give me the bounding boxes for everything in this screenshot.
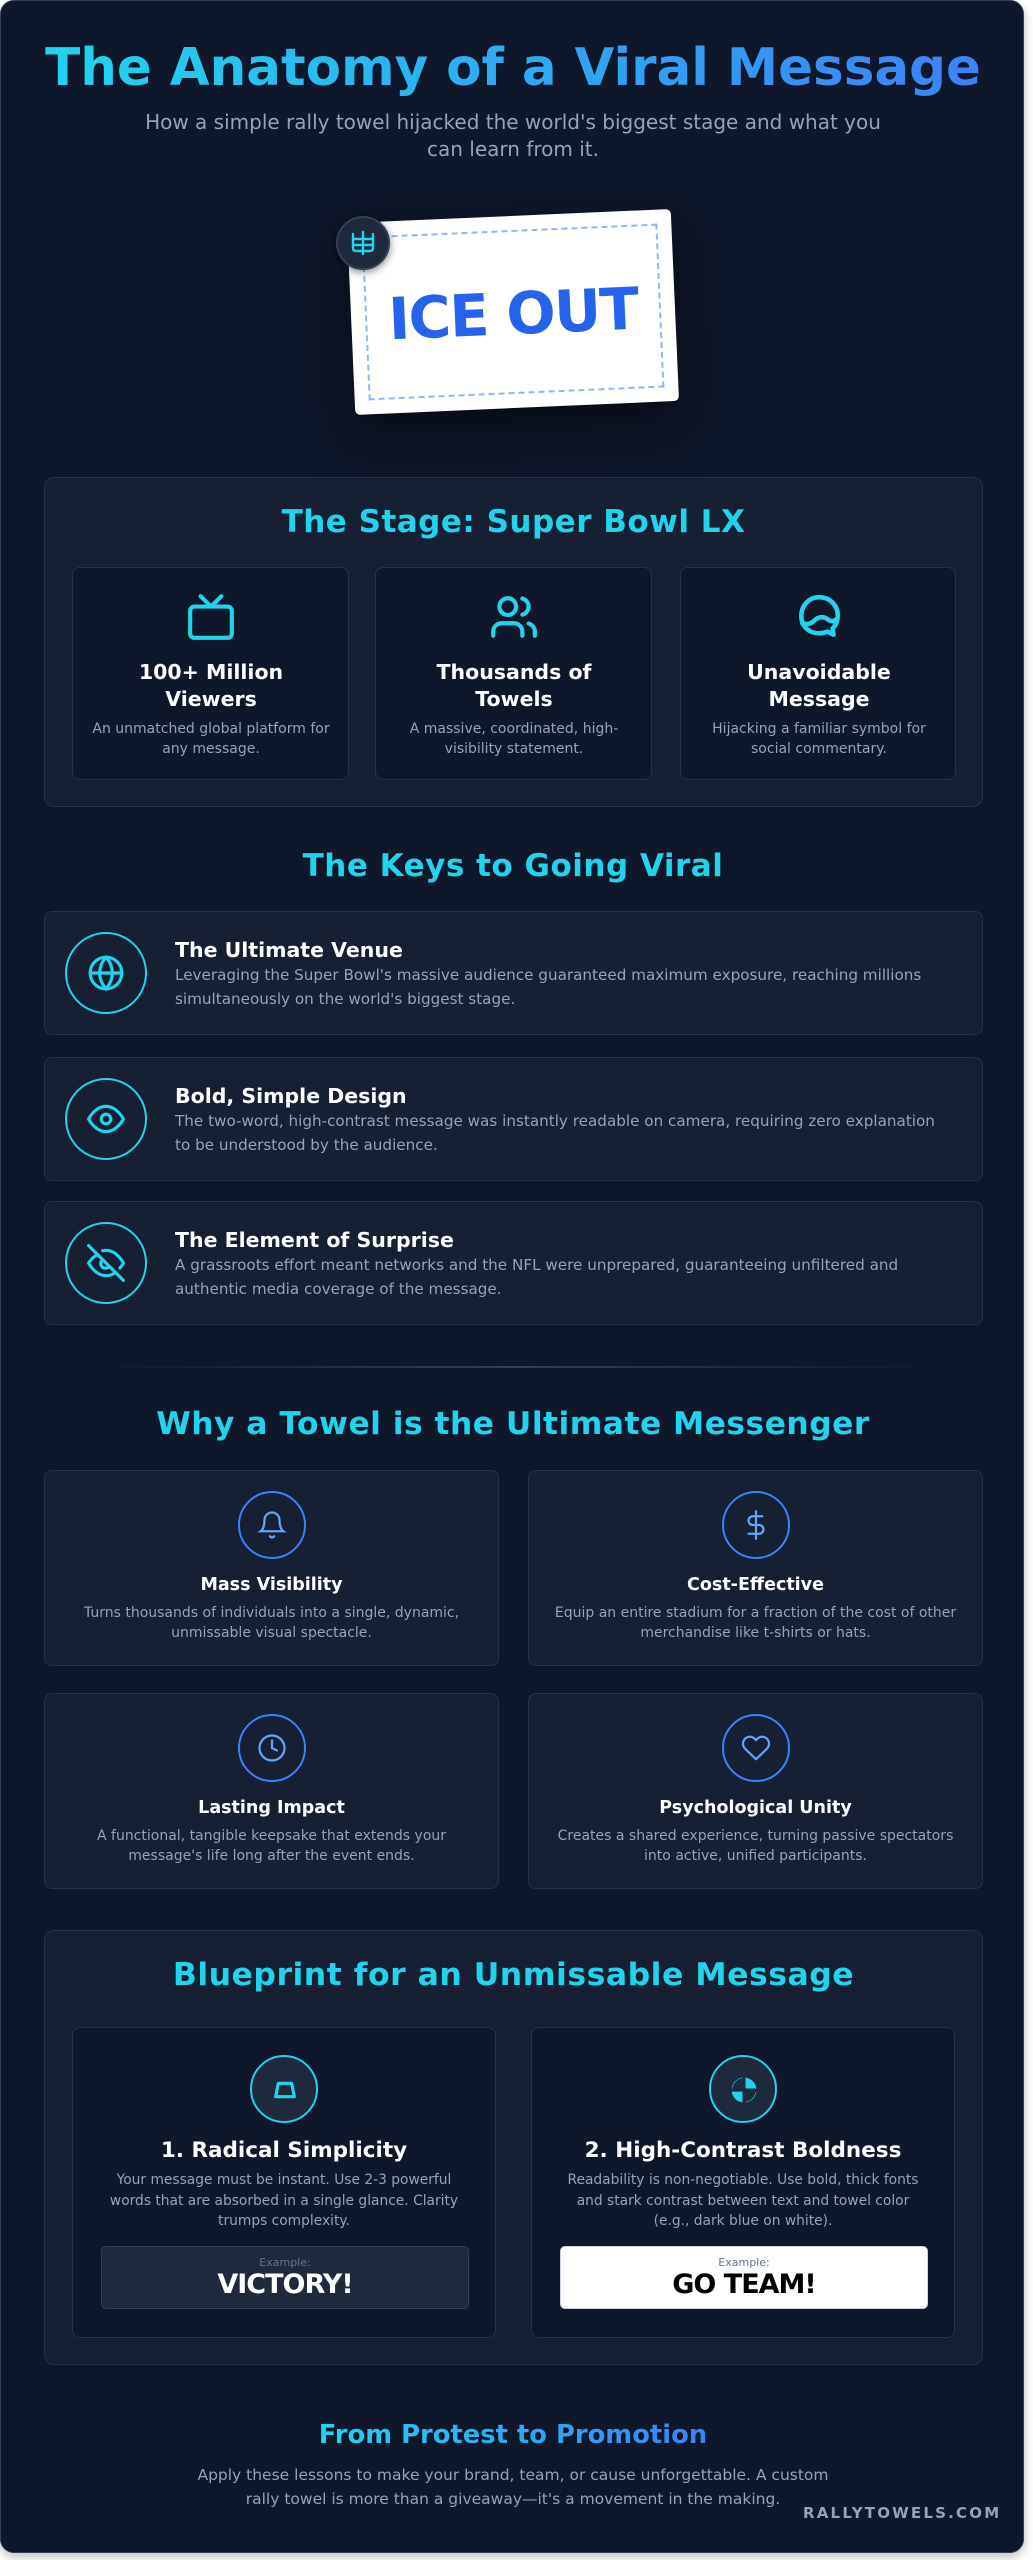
- row: ultimate venue: The Ultimate Venue: [175, 938, 403, 962]
- row: bold simple design: Bold, Simple Design: [175, 1084, 407, 1108]
- card: cost-effective: Equip an entire stadium for a fraction of the cost of other merchandise like t-shirts or hats.: [555, 1605, 956, 1641]
- icon: eye-off: [65, 1222, 147, 1304]
- card: high contrast: Readability is non-negotiable. Use bold, thick fonts and stark contrast between text and towel color (e.g., dark blue on white).: [568, 2172, 918, 2229]
- brand: RALLYTOWELS.COM: [803, 2504, 1001, 2522]
- card: viewers: [72, 567, 349, 780]
- example: victory: VICTORY!: [217, 2269, 353, 2300]
- card: cost-effective: [528, 1470, 983, 1666]
- card: viewers: 100+ Million Viewers: [139, 660, 283, 711]
- row: element of surprise: The Element of Surprise: [175, 1228, 454, 1252]
- icon: bell: [238, 1491, 306, 1559]
- example: victory: [101, 2246, 469, 2309]
- heading: why a towel: Why a Towel is the Ultimate Messenger: [156, 1406, 870, 1442]
- row: element of surprise: A grassroots effort meant networks and the NFL were unprepared, guaranteeing unfiltered and authentic media coverage of the message.: [175, 1256, 898, 1298]
- card: high contrast: [531, 2027, 955, 2338]
- icon: eye: [65, 1078, 147, 1160]
- icon: contrast: [709, 2055, 777, 2123]
- icon: dollar: [722, 1491, 790, 1559]
- panel: blueprint: [44, 1930, 983, 2365]
- example: go team: GO TEAM!: [672, 2269, 816, 2300]
- panel: the stage: [44, 477, 983, 807]
- card: viewers: An unmatched global platform for any message.: [92, 721, 330, 757]
- towel: ICE OUT: [347, 209, 679, 415]
- card: high contrast: 2. High-Contrast Boldness: [585, 2138, 901, 2163]
- icon: simplicity: [250, 2055, 318, 2123]
- card: message: Hijacking a familiar symbol for social commentary.: [712, 721, 926, 757]
- icon: towel badge: [336, 216, 390, 270]
- card: message: Unavoidable Message: [747, 660, 891, 711]
- card: radical simplicity: 1. Radical Simplicity: [161, 2138, 407, 2163]
- example: go team: [560, 2246, 928, 2309]
- card: radical simplicity: Your message must be instant. Use 2-3 powerful words that are absorbed in a single glance. Clarity trumps complexity.: [110, 2172, 458, 2229]
- heading: keys: The Keys to Going Viral: [303, 848, 723, 884]
- card: psychological unity: Creates a shared experience, turning passive spectators into active, unified participants.: [558, 1828, 953, 1864]
- card: lasting impact: [44, 1693, 499, 1889]
- card: psychological unity: Psychological Unity: [659, 1798, 852, 1818]
- example: victory: Example:: [259, 2256, 311, 2269]
- icon: tv: [188, 594, 234, 640]
- card: cost-effective: Cost-Effective: [687, 1575, 824, 1595]
- example: go team: Example:: [718, 2256, 770, 2269]
- row: ultimate venue: [44, 911, 983, 1035]
- icon: users: [491, 596, 537, 638]
- card: towels: [375, 567, 652, 780]
- row: bold simple design: [44, 1057, 983, 1181]
- card: message: [680, 567, 956, 780]
- card: lasting impact: A functional, tangible keepsake that extends your message's life long after the event ends.: [97, 1828, 446, 1864]
- icon: message circle: [799, 594, 840, 637]
- row: ultimate venue: Leveraging the Super Bowl's massive audience guaranteed maximum exposure, reaching millions simultaneously on the world's biggest stage.: [175, 966, 921, 1008]
- footer text: Apply these lessons to make your brand, team, or cause unforgettable. A custom rally towel is more than a giveaway—it's a movement in the making.: [197, 2466, 829, 2508]
- row: element of surprise: [44, 1201, 983, 1325]
- footer heading: From Protest to Promotion: [319, 2420, 707, 2450]
- icon: clock: [238, 1714, 306, 1782]
- card: mass visibility: [44, 1470, 499, 1666]
- card: towels: Thousands of Towels: [437, 660, 591, 711]
- subtitle: How a simple rally towel hijacked the world's biggest stage and what you can learn from it.: [145, 110, 881, 161]
- card: mass visibility: Turns thousands of individuals into a single, dynamic, unmissable visual spectacle.: [84, 1605, 459, 1641]
- title: The Anatomy of a Viral Message: [45, 38, 981, 98]
- row: bold simple design: The two-word, high-contrast message was instantly readable on camera, requiring zero explanation to be understood by the audience.: [175, 1112, 935, 1154]
- icon: heart: [722, 1714, 790, 1782]
- icon: globe: [65, 932, 147, 1014]
- heading: blueprint: Blueprint for an Unmissable Message: [173, 1957, 854, 1993]
- heading: stage: The Stage: Super Bowl LX: [282, 504, 745, 540]
- card: mass visibility: Mass Visibility: [200, 1575, 343, 1595]
- card: psychological unity: [528, 1693, 983, 1889]
- card: lasting impact: Lasting Impact: [198, 1798, 345, 1818]
- towel text: ICE OUT: [387, 275, 639, 353]
- card: towels: A massive, coordinated, high-visibility statement.: [410, 721, 618, 757]
- card: radical simplicity: [72, 2027, 496, 2338]
